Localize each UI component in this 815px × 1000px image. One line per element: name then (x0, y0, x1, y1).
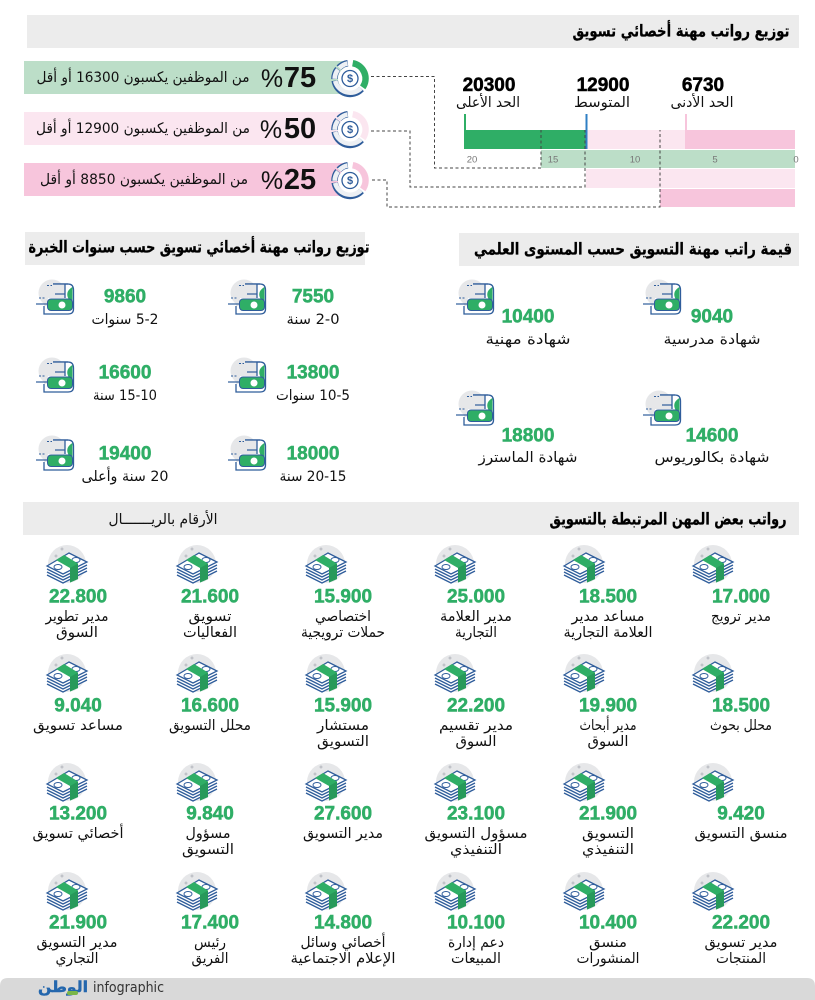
item: bachelor degree (643, 390, 770, 466)
item: 5-10 years: 10-5 سنوات (276, 388, 350, 404)
job: منسق التسويق: منسق التسويق (694, 826, 788, 842)
item: bachelor degree: شهادة بكالوريوس (654, 450, 770, 466)
job: مستشار التسويق: التسويق (317, 734, 369, 750)
job: مدير تسويق المنتجات: مدير تسويق (704, 935, 778, 951)
job: مدير التسويق التجاري (36, 872, 118, 967)
panel: salary by education (456, 233, 799, 466)
item: 20+ years: 20 سنة وأعلى (82, 466, 168, 485)
row: 75 percent: $ (347, 73, 353, 85)
job: أخصائي وسائل الإعلام الاجتماعية: الإعلام الاجتماعية (290, 951, 396, 967)
heading bar (23, 502, 799, 535)
job: مدير أبحاث السوق (564, 654, 637, 750)
item: 2-5 years: 5-2 سنوات (92, 312, 158, 328)
item: master degree: شهادة الماسترز (477, 450, 578, 466)
job: منسق المنشورات: منسق (589, 935, 627, 951)
job: مدير تطوير السوق: 22.800 (49, 586, 107, 608)
job: مدير التسويق التجاري: 21.900 (49, 912, 107, 934)
job: مساعد مدير العلامة التجارية: مساعد مدير (571, 609, 644, 625)
item: 10-15 years (36, 358, 157, 404)
job: تسويق الفعاليات (177, 545, 239, 641)
item: 20+ years (36, 436, 168, 485)
job: رئيس الفريق: 17.400 (181, 912, 239, 934)
panel: salary percentile rows (24, 61, 366, 196)
job: أخصائي وسائل الإعلام الاجتماعية: أخصائي وسائل (300, 932, 386, 951)
item: 0-2 years: 7550 (292, 286, 334, 308)
job: مدير تقسيم السوق: 22.200 (447, 696, 505, 716)
item: 15-20 years: 20-15 سنة (280, 469, 346, 485)
job: مدير العلامة التجارية: التجارية (455, 625, 497, 641)
job: مستشار التسويق: مستشار (316, 718, 369, 734)
label: maximum (456, 75, 520, 111)
job: مساعد مدير العلامة التجارية: 18.500 (579, 586, 637, 608)
job: أخصائي تسويق: 13.200 (49, 804, 107, 824)
job: رئيس الفريق: الفريق (192, 951, 228, 967)
heading (459, 233, 799, 266)
job: مدير تقسيم السوق (435, 654, 513, 750)
job: تسويق الفعاليات: تسويق (188, 609, 232, 625)
item: 20+ years: 19400 (99, 444, 151, 464)
job: محلل بحوث (693, 654, 772, 734)
row: 25 percent: $ (347, 175, 353, 187)
infographic label: infographic (93, 980, 164, 996)
job: مساعد مدير العلامة التجارية (564, 545, 652, 641)
job: مساعد تسويق: مساعد تسويق (33, 718, 123, 734)
job: محلل بحوث: محلل بحوث (710, 718, 772, 734)
heading (25, 232, 370, 265)
job: مساعد تسويق (33, 654, 123, 734)
job: مسؤول التسويق: 9.840 (186, 804, 234, 824)
row: 50 percent: 50 (284, 113, 316, 145)
axis labels (467, 154, 799, 166)
axis labels: 0 (793, 154, 799, 166)
item: 5-10 years (228, 358, 350, 404)
label: median (574, 75, 630, 111)
job: التسويق التنفيذي: التنفيذي (582, 842, 634, 858)
title bar (27, 15, 799, 48)
row: 75 percent: من الموظفين يكسبون 16300 أو أقل (36, 67, 249, 86)
job: التسويق التنفيذي: 21.900 (579, 804, 637, 824)
item: 15-20 years: 18000 (287, 444, 339, 464)
job: مدير تطوير السوق: مدير تطوير (45, 609, 108, 625)
job: مدير العلامة التجارية: مدير العلامة (440, 609, 512, 625)
item: school certificate (643, 280, 760, 348)
item: 15-20 years (228, 436, 346, 485)
label: minimum (670, 75, 734, 111)
job: مسؤول التسويق: مسؤول (186, 826, 230, 842)
row: 25 percent (24, 163, 366, 196)
job: اختصاصي حملات ترويجية: 15.900 (314, 586, 372, 608)
job: منسق المنشورات: المنشورات (576, 951, 640, 967)
item: 10-15 years: 15-10 سنة (93, 388, 157, 404)
item: vocational certificate: شهادة مهنية (486, 332, 570, 348)
item: 2-5 years: 9860 (104, 286, 146, 308)
job: أخصائي وسائل الإعلام الاجتماعية (290, 872, 396, 967)
job: منسق التسويق (693, 763, 788, 842)
label: minimum: الحد الأدنى (670, 93, 734, 111)
item: 2-5 years (36, 280, 158, 328)
job: محلل التسويق: محلل التسويق (169, 718, 251, 734)
item: master degree: 18800 (502, 426, 554, 446)
job: رئيس الفريق: رئيس (194, 935, 226, 951)
job: منسق المنشورات: 10.400 (579, 912, 637, 934)
job: مدير ترويج: مدير ترويج (711, 609, 771, 625)
job: اختصاصي حملات ترويجية: حملات ترويجية (301, 625, 385, 641)
label: median: 12900 (577, 75, 629, 96)
job: مدير تسويق المنتجات: المنتجات (716, 951, 766, 967)
row: 50 percent: $ (347, 124, 353, 136)
job: مسؤول التسويق: التسويق (182, 842, 234, 858)
item: master degree (456, 390, 578, 466)
job: منسق التسويق: 9.420 (717, 804, 765, 824)
item: vocational certificate (456, 280, 570, 348)
job: مدير التسويق (303, 763, 383, 842)
label: maximum: الحد الأعلى (456, 93, 520, 111)
label: maximum: 20300 (463, 75, 515, 96)
job: دعم إدارة المبيعات: دعم إدارة (448, 935, 504, 951)
job: مدير التسويق: مدير التسويق (303, 826, 383, 842)
job: أخصائي تسويق (32, 763, 124, 842)
job: مدير أبحاث السوق: مدير أبحاث (580, 715, 636, 734)
job: مساعد تسويق: 9.040 (54, 696, 102, 716)
axis labels: 10 (630, 154, 640, 166)
row: 75 percent: 75 (284, 62, 316, 94)
connector: 25 percent to chart (372, 130, 660, 207)
job: محلل التسويق (169, 654, 251, 734)
connector: 50 percent to chart (371, 130, 585, 187)
job: مدير تقسيم السوق: السوق (456, 734, 496, 750)
job: دعم إدارة المبيعات: 10.100 (447, 912, 505, 934)
item: vocational certificate: 10400 (502, 306, 554, 328)
row: 25 percent: % (261, 167, 283, 195)
axis labels: 15 (548, 154, 558, 166)
job: مدير تطوير السوق (45, 545, 108, 641)
job: مدير تسويق المنتجات: 22.200 (712, 912, 770, 934)
job: مدير التسويق: 27.600 (314, 804, 372, 824)
row: 25 percent: من الموظفين يكسبون 8850 أو أقل (40, 169, 248, 188)
job: مستشار التسويق: 15.900 (314, 696, 372, 716)
job: مدير أبحاث السوق: السوق (588, 734, 628, 750)
panel: related jobs salaries (23, 502, 799, 967)
job: مسؤول التسويق التنفيذي: مسؤول التسويق (424, 826, 528, 842)
job: تسويق الفعاليات: الفعاليات (183, 625, 237, 641)
item: 0-2 years: 2-0 سنة (286, 312, 340, 328)
job: مساعد مدير العلامة التجارية: العلامة التجارية (564, 625, 652, 641)
job: التسويق التنفيذي: التسويق (582, 826, 634, 842)
job: دعم إدارة المبيعات: المبيعات (451, 951, 501, 967)
job: مسؤول التسويق (177, 763, 234, 858)
job: مدير العلامة التجارية: 25.000 (447, 586, 505, 608)
job: محلل التسويق: 16.600 (181, 696, 239, 716)
job: مدير التسويق التجاري: مدير التسويق (36, 935, 118, 951)
job: مسؤول التسويق التنفيذي: التنفيذي (450, 842, 502, 858)
job: مستشار التسويق (306, 654, 372, 750)
job: اختصاصي حملات ترويجية (301, 545, 385, 641)
row: 75 percent: % (261, 65, 283, 93)
chart: salary range bars (456, 75, 799, 207)
logo: الوطن (38, 978, 88, 996)
axis labels: 20 (467, 154, 477, 166)
job: تسويق الفعاليات: 21.600 (181, 586, 239, 608)
panel: salary by experience (25, 232, 370, 485)
job: مدير تطوير السوق: السوق (56, 625, 98, 641)
label: minimum: 6730 (682, 75, 724, 96)
item: 0-2 years (228, 280, 340, 328)
row: 50 percent (24, 112, 366, 145)
job: منسق المنشورات (564, 872, 640, 967)
job: مدير العلامة التجارية (435, 545, 512, 641)
job: مدير تسويق المنتجات (693, 872, 778, 967)
job: مدير أبحاث السوق: 19.900 (579, 696, 637, 716)
row: 50 percent: من الموظفين يكسبون 12900 أو أقل (36, 118, 250, 137)
item: 10-15 years: 16600 (99, 362, 151, 384)
job: محلل بحوث: 18.500 (712, 696, 770, 716)
heading: توزيع رواتب مهنة أخصائي تسويق حسب سنوات الخبرة (28, 236, 370, 258)
job: أخصائي وسائل الإعلام الاجتماعية: 14.800 (314, 912, 372, 934)
row: 50 percent: % (260, 116, 282, 144)
item: school certificate: شهادة مدرسية (664, 332, 760, 348)
job: دعم إدارة المبيعات (435, 872, 505, 967)
job: مسؤول التسويق التنفيذي: 23.100 (447, 804, 505, 824)
job: مدير ترويج (693, 545, 771, 625)
row: 25 percent: 25 (284, 164, 316, 196)
job: مسؤول التسويق التنفيذي (424, 763, 528, 858)
job: مدير تقسيم السوق: مدير تقسيم (439, 718, 513, 734)
job: التسويق التنفيذي (564, 763, 637, 858)
item: school certificate: 9040 (691, 306, 733, 328)
job: مدير التسويق التجاري: التجاري (56, 951, 98, 967)
job: أخصائي تسويق: أخصائي تسويق (32, 823, 124, 842)
label: median: المتوسط (574, 95, 630, 111)
job: مدير ترويج: 17.000 (712, 586, 770, 608)
connector: 75 percent to chart (371, 76, 541, 168)
row: 75 percent (24, 61, 366, 94)
footer (0, 978, 815, 1000)
axis labels: 5 (712, 154, 718, 166)
item: 5-10 years: 13800 (287, 362, 339, 384)
item: bachelor degree: 14600 (686, 426, 738, 446)
job: رئيس الفريق (177, 872, 239, 967)
job: اختصاصي حملات ترويجية: اختصاصي (315, 609, 371, 625)
heading bar: الأرقام بالريـــــــال (108, 510, 218, 528)
